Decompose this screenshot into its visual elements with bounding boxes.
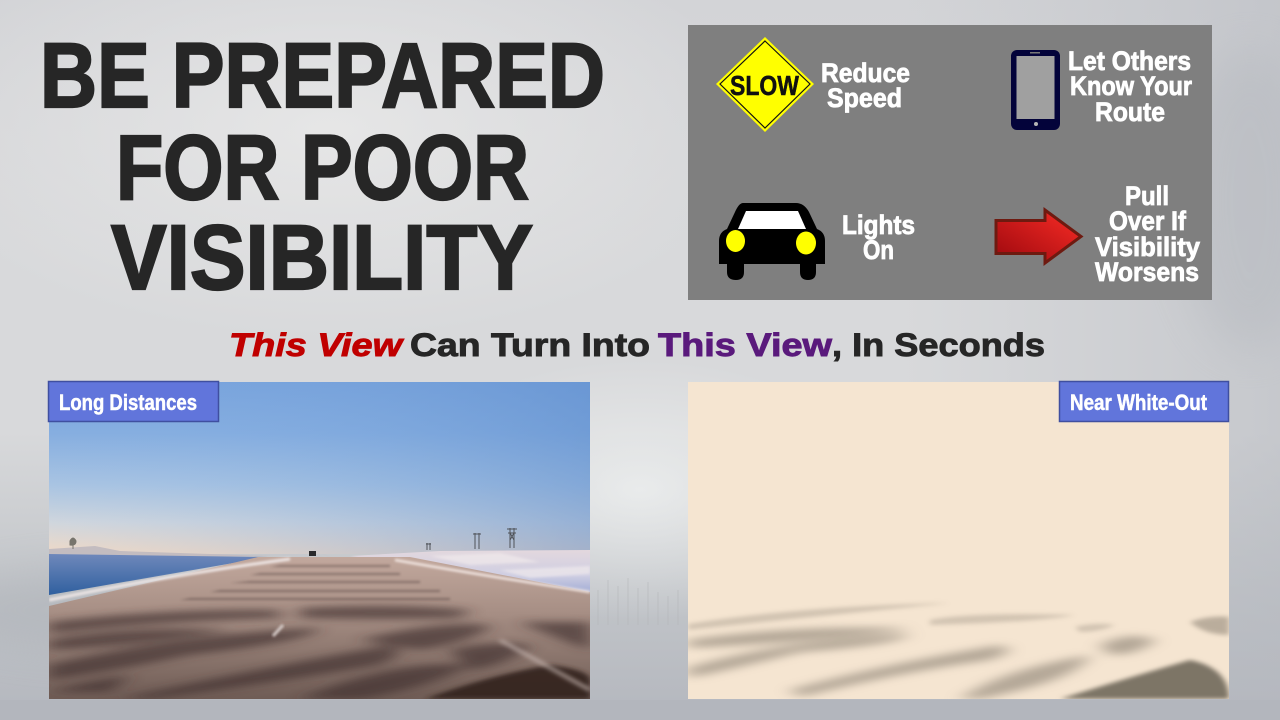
title: FOR POOR [116,117,529,219]
arrow: pull over [996,210,1081,263]
text: pull over if visibility worsens: Worsens [1095,257,1199,287]
text: lights on: Lights [842,210,915,240]
icon: car [719,203,825,280]
subtitle: Can Turn Into [410,327,650,363]
title: BE PREPARED [40,25,605,127]
icon: slow sign: SLOW [730,70,799,101]
label: long distances [48,382,218,422]
icon: phone [1011,50,1060,130]
text: let others know your route: Let Others [1068,46,1191,76]
text: pull over if visibility worsens [1095,181,1200,287]
text: let others know your route: Route [1095,97,1165,127]
subtitle: This View [229,327,404,363]
photo: clear road with long visibility [49,382,590,699]
subtitle [229,327,1045,363]
text: pull over if visibility worsens: Over If [1109,206,1186,236]
text: let others know your route [1068,46,1192,127]
icon: slow sign [716,37,814,132]
text: reduce speed [821,58,910,113]
text: let others know your route: Know Your [1070,71,1192,101]
photo: near white-out road [688,382,1229,699]
text: reduce speed: Speed [827,83,902,113]
title [40,25,605,309]
subtitle: , In Seconds [832,327,1045,363]
panel: preparedness tips [688,25,1212,300]
text: lights on: On [863,235,894,265]
label: long distances: Long Distances [59,390,197,415]
text: reduce speed: Reduce [821,58,910,88]
subtitle: This View [658,327,832,363]
text: pull over if visibility worsens: Pull [1125,181,1169,211]
label: near white-out: Near White-Out [1070,390,1208,415]
text: pull over if visibility worsens: Visibility [1095,232,1200,262]
label: near white-out [1060,382,1228,422]
text: lights on [842,210,915,265]
title: VISIBILITY [111,207,533,309]
